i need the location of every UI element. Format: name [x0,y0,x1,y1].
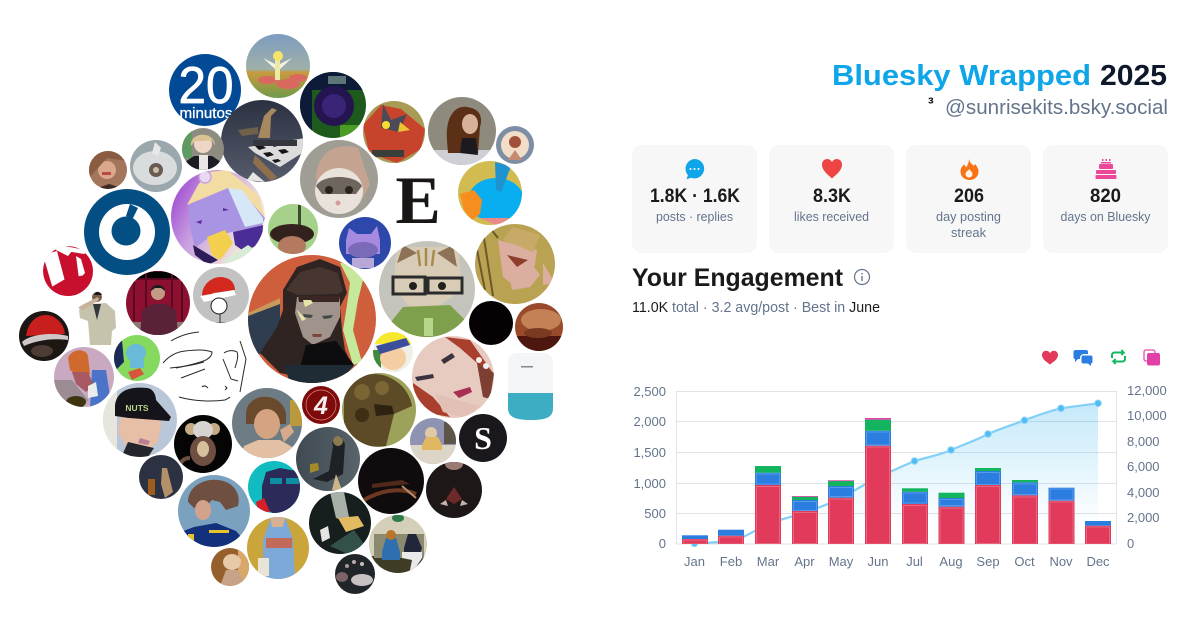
avatar: green pixel art [300,72,366,138]
avatar: man on red curtain [126,271,190,336]
month labels: Jul [906,554,923,569]
right axis labels: 4,000 [1127,485,1160,500]
right axis labels: 0 [1127,536,1134,551]
left axis labels: 1,500 [633,445,666,460]
icon: birthday cake [1096,159,1116,179]
stat card: likes received [769,145,894,253]
month labels: Oct [1014,554,1035,569]
avatar: dark embers [358,448,424,514]
stat card: posting streak: 206 [954,186,984,207]
avatar: S logo: S [474,420,492,456]
avatar: blue wooper [114,335,160,381]
avatar: rust texture [515,303,563,351]
avatar: blonde person [182,128,224,172]
combo chart: monthly engagement [633,383,1167,569]
stat card: posts and replies: 1.8K · 1.6K [650,186,740,207]
icon: chat bubble [685,159,704,179]
avatar: black circle [469,301,513,345]
section heading: Your Engagement [632,264,844,292]
avatar: flower creature [246,34,310,98]
avatar: purple penguin [171,170,265,265]
icon: flame [960,159,978,180]
right axis labels: 8,000 [1127,434,1160,449]
avatar: colourful fox [363,101,425,163]
avatar: yellow coat [247,517,309,579]
left axis labels [633,384,666,551]
avatar: red-haired woman [412,336,494,418]
avatar: tree creature [342,373,416,448]
avatar: 4F logo: 4 [313,392,328,420]
avatar: purple cat [339,217,391,269]
engagement summary: 11.0K total · 3.2 avg/post · Best in June [632,300,880,316]
month labels: Feb [720,554,742,569]
stat card: posting streak [906,145,1031,253]
icon: legend reposts [1112,350,1125,364]
avatar: chess board creature [221,100,307,182]
avatar: naruto [373,332,413,372]
right axis labels: 12,000 [1127,383,1167,398]
stat card: posting streak: day posting [936,209,1001,224]
stat card: posting streak: streak [951,225,986,240]
avatar: small illustrated girl [496,126,534,164]
avatar: pink cartoon [54,347,114,408]
cumulative line [694,403,1098,543]
month labels: Jun [868,554,888,569]
right axis labels: 10,000 [1127,408,1167,423]
left axis labels: 1,000 [633,476,666,491]
icon: legend quotes [1144,350,1160,366]
avatar: mudkip [458,161,524,226]
month labels: Aug [939,554,963,569]
stat card: days on Bluesky: 820 [1090,186,1121,207]
left axis labels: 500 [644,506,666,521]
month labels: Nov [1049,554,1073,569]
month labels: Jan [684,554,705,569]
avatar: 4F logo [302,386,340,424]
avatar: cubone [130,140,182,192]
avatar: E logo [380,162,456,238]
avatar: small blonde [211,548,249,586]
avatar: monkey [174,415,232,473]
icon: legend heart [1042,351,1058,364]
avatar: 20 minutos logo: 20 [178,57,234,115]
month labels: Apr [794,554,815,569]
stat card: posts and replies: posts · replies [656,209,733,224]
avatar: frowning woman [232,388,302,458]
avatar: santa gremlin [19,311,69,361]
header title: 2025 [1100,60,1167,92]
left axis labels: 2,000 [633,414,666,429]
stacked bars [682,418,1111,544]
handle: @sunrisekits.bsky.social [945,96,1168,119]
avatar: E logo: E [395,162,441,238]
avatar: curly-haired woman [428,97,496,165]
avatar: person in foliage [268,204,318,256]
stat card: likes received: likes received [794,209,869,224]
avatar: mantis on grey [296,427,360,491]
avatar cluster [19,34,563,594]
chart legend icons [1042,350,1160,366]
month labels [684,554,1110,569]
month labels: Dec [1086,554,1110,569]
avatar: 20 minutos logo [169,54,241,126]
avatar: mantis with bottle [139,455,183,499]
month labels: May [829,554,854,569]
icon: info [854,270,870,284]
avatar: 20 minutos logo: minutos [180,105,232,122]
right axis labels: 2,000 [1127,510,1160,525]
avatar: blue ring logo [84,189,170,275]
avatar: paddington bear [369,514,427,573]
avatar: illustrated person with bag [475,224,555,304]
month labels: Mar [757,554,780,569]
left axis labels: 2,500 [633,384,666,399]
avatar: woman portrait small [89,151,127,189]
avatar: red P logo [43,245,93,296]
avatar: line sketch face [163,332,246,401]
gridlines [676,391,1116,544]
avatar: duck in suit [309,492,371,556]
avatar: nuts cap: NUTS [125,403,149,413]
avatar: nuts cap [103,383,177,460]
stat card: posts and replies [632,145,757,253]
avatar: cat with glasses [379,241,475,337]
icon: legend replies [1074,350,1092,366]
stat card: days on Bluesky [1043,145,1168,253]
stat card: days on Bluesky: days on Bluesky [1060,209,1151,224]
right axis labels: 6,000 [1127,459,1160,474]
left axis labels: 0 [659,536,666,551]
month labels: Sep [976,554,1000,569]
avatar: white suit man [78,292,116,345]
icon: heart [822,159,842,178]
handle: ³ [928,94,934,113]
avatar: goth figure [426,458,482,518]
avatar: blonde eating [410,418,456,464]
avatar: main portrait [248,255,376,383]
right axis labels [1127,383,1167,551]
avatar: dark flowers [335,554,375,594]
cumulative area [694,403,1098,544]
avatar: S logo [459,414,507,462]
stat card: likes received: 8.3K [813,186,851,207]
line points [691,400,1101,547]
header title: Bluesky Wrapped [832,60,1091,92]
avatar: dehumidifier [508,353,553,420]
avatar: vader [248,461,302,514]
avatar: santa stick figure [193,267,249,324]
avatar: woman in jersey [178,475,250,547]
avatar: cat in hat [300,140,378,218]
